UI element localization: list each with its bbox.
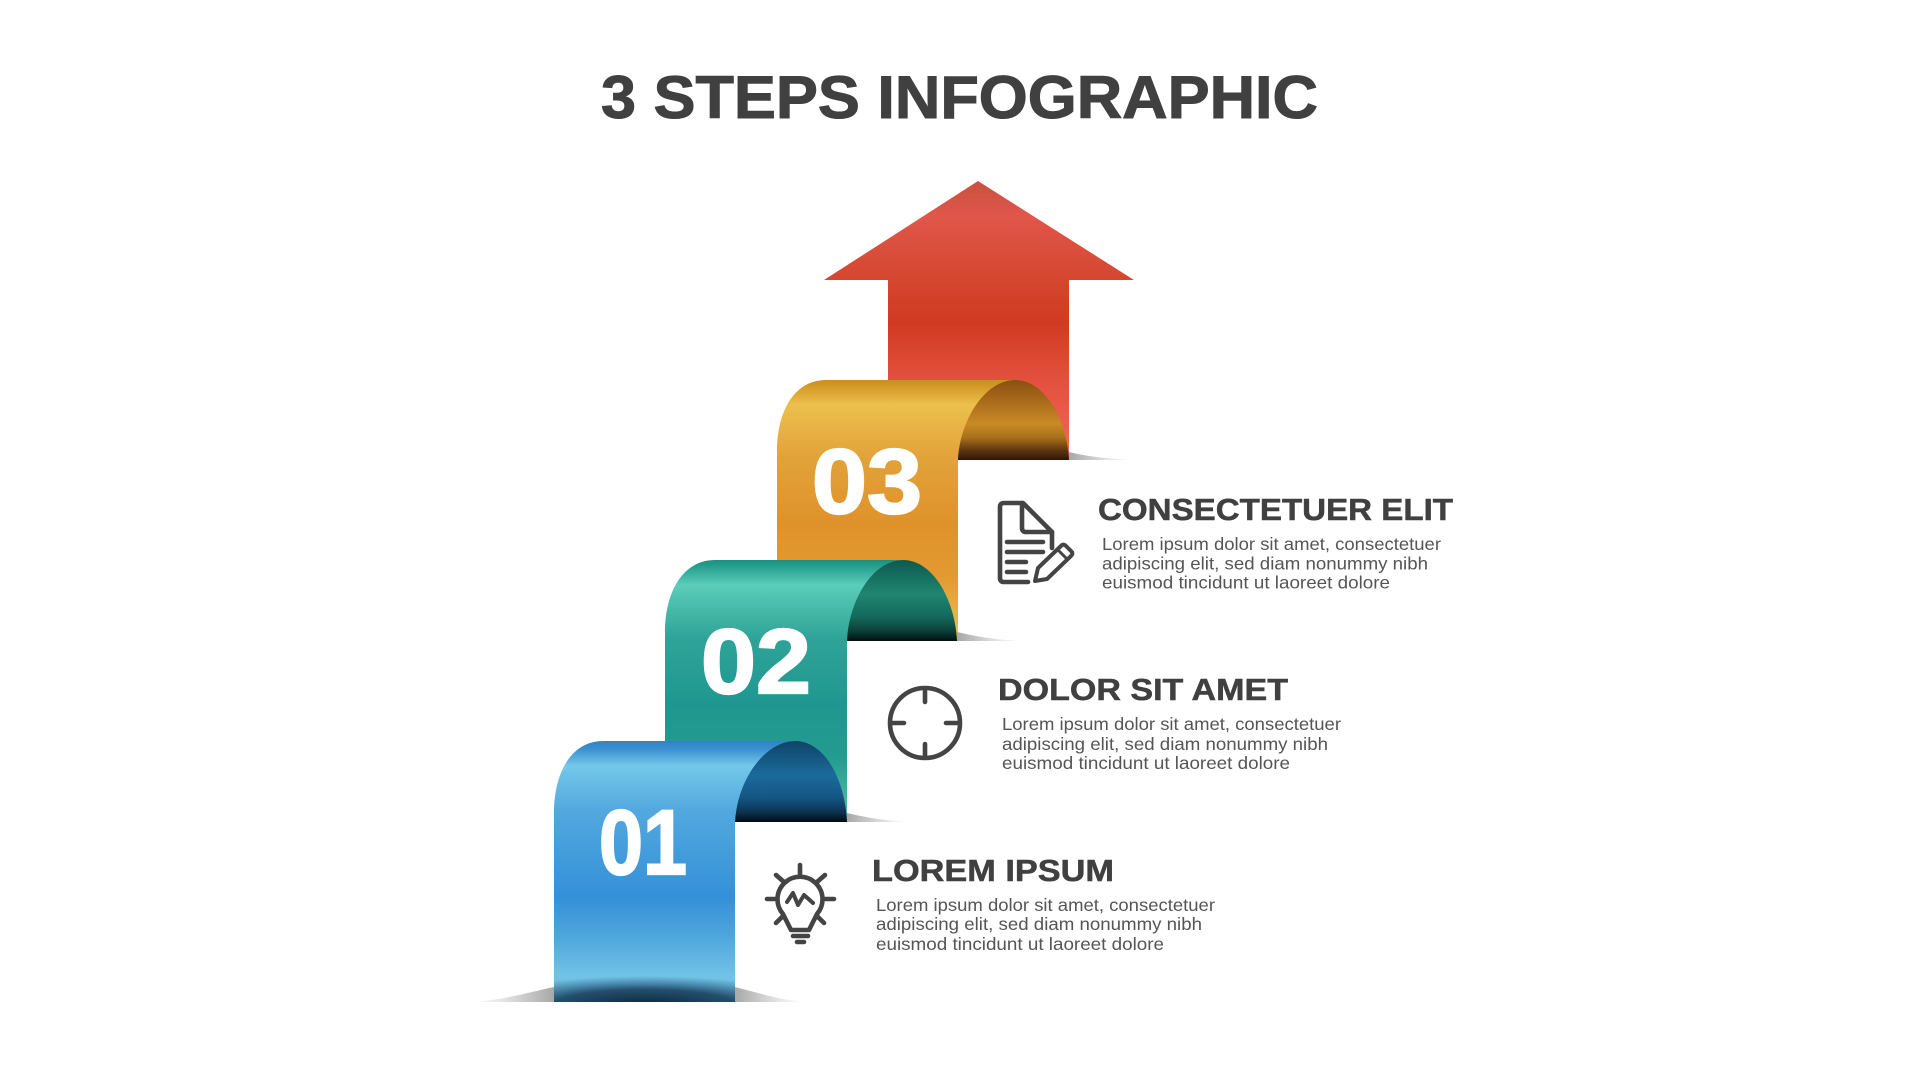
step 2 ribbon <box>665 560 1024 822</box>
text block: consectetuer elit <box>1098 492 1453 592</box>
text block: lorem ipsum: Lorem ipsum dolor sit amet, consectetuer <box>876 895 1215 915</box>
icon: crosshair target <box>890 688 960 758</box>
text block: dolor sit amet: euismod tincidunt ut laoreet dolore <box>1002 753 1290 773</box>
text block: dolor sit amet: Lorem ipsum dolor sit amet, consectetuer <box>1002 714 1341 734</box>
text block: consectetuer elit: euismod tincidunt ut laoreet dolore <box>1102 572 1390 592</box>
text block: dolor sit amet: adipiscing elit, sed diam nonummy nibh <box>1002 734 1328 754</box>
icon: light bulb <box>767 865 834 942</box>
text block: consectetuer elit: CONSECTETUER ELIT <box>1098 492 1453 527</box>
text block: lorem ipsum: euismod tincidunt ut laoreet dolore <box>876 934 1164 954</box>
text block: lorem ipsum: adipiscing elit, sed diam nonummy nibh <box>876 914 1202 934</box>
text block: lorem ipsum: LOREM IPSUM <box>872 853 1114 888</box>
text block: dolor sit amet: DOLOR SIT AMET <box>998 672 1288 707</box>
text block: lorem ipsum <box>872 853 1215 954</box>
text block: consectetuer elit: adipiscing elit, sed diam nonummy nibh <box>1102 554 1428 574</box>
title: 3 STEPS INFOGRAPHIC <box>601 64 1318 131</box>
number 01: 01 <box>599 792 687 894</box>
number 03: 03 <box>812 431 922 533</box>
number 02: 02 <box>701 611 811 713</box>
step 1 ribbon <box>480 741 903 1002</box>
text block: consectetuer elit: Lorem ipsum dolor sit amet, consectetuer <box>1102 534 1441 554</box>
step 3 ribbon <box>777 380 1136 641</box>
icon: document with pencil <box>1000 503 1072 582</box>
text block: dolor sit amet <box>998 672 1341 773</box>
arrow <box>824 181 1134 460</box>
